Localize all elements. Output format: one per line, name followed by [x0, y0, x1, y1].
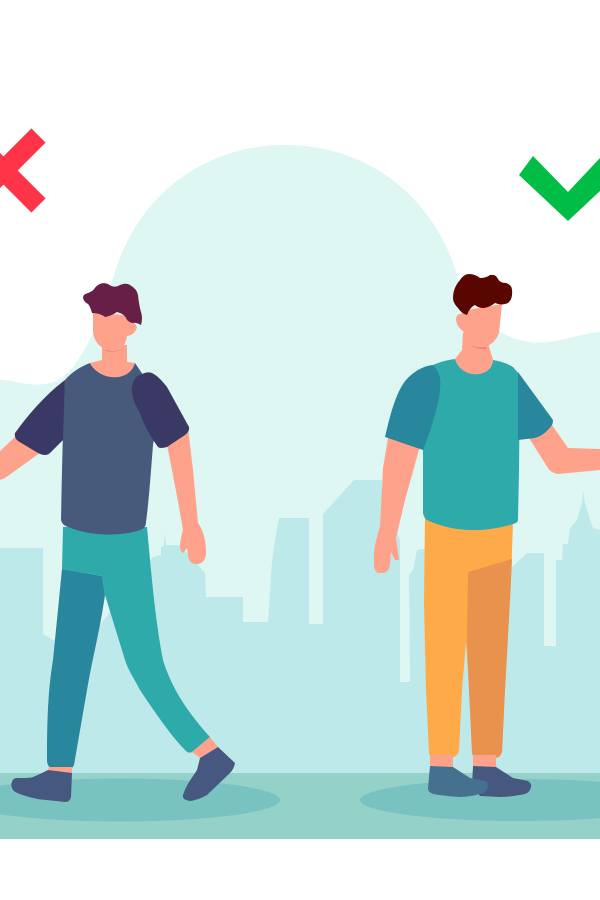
person left: wrong posture	[0, 283, 235, 802]
icon: red cross	[0, 136, 38, 206]
ground shadow right	[360, 779, 600, 821]
right person trousers	[424, 518, 513, 758]
right person far arm	[529, 425, 600, 474]
right person face	[456, 304, 502, 347]
right person back shoe	[472, 766, 531, 797]
left person neck	[90, 345, 135, 377]
background hill and sun	[0, 145, 600, 775]
left person torso	[61, 363, 160, 535]
left person far arm	[0, 432, 44, 482]
right person hair	[453, 274, 512, 315]
city skyline	[0, 480, 600, 775]
right person near sleeve	[385, 365, 440, 450]
left person back leg	[47, 569, 105, 770]
left person front leg	[62, 527, 210, 753]
ground shadow left	[0, 778, 280, 822]
left person near sleeve	[132, 372, 189, 448]
left person far sleeve	[15, 380, 65, 455]
ground	[0, 773, 600, 839]
right person neck	[455, 333, 493, 374]
left person face	[93, 312, 137, 351]
left person near arm	[166, 428, 206, 564]
right person neck shadow	[470, 345, 487, 349]
right person near arm	[374, 438, 420, 573]
right person ankles	[430, 755, 496, 768]
right person front shoe	[428, 766, 488, 797]
left person ankles	[48, 737, 218, 774]
left person hair	[83, 283, 142, 325]
right person far sleeve	[518, 372, 553, 440]
right person trouser shade	[467, 559, 512, 758]
right person torso	[420, 359, 520, 530]
left person back shoe	[11, 770, 72, 802]
person right: correct posture	[374, 274, 600, 797]
left person front shoe	[183, 747, 235, 801]
icon: green check	[519, 156, 600, 221]
left person neck shadow	[103, 349, 122, 352]
